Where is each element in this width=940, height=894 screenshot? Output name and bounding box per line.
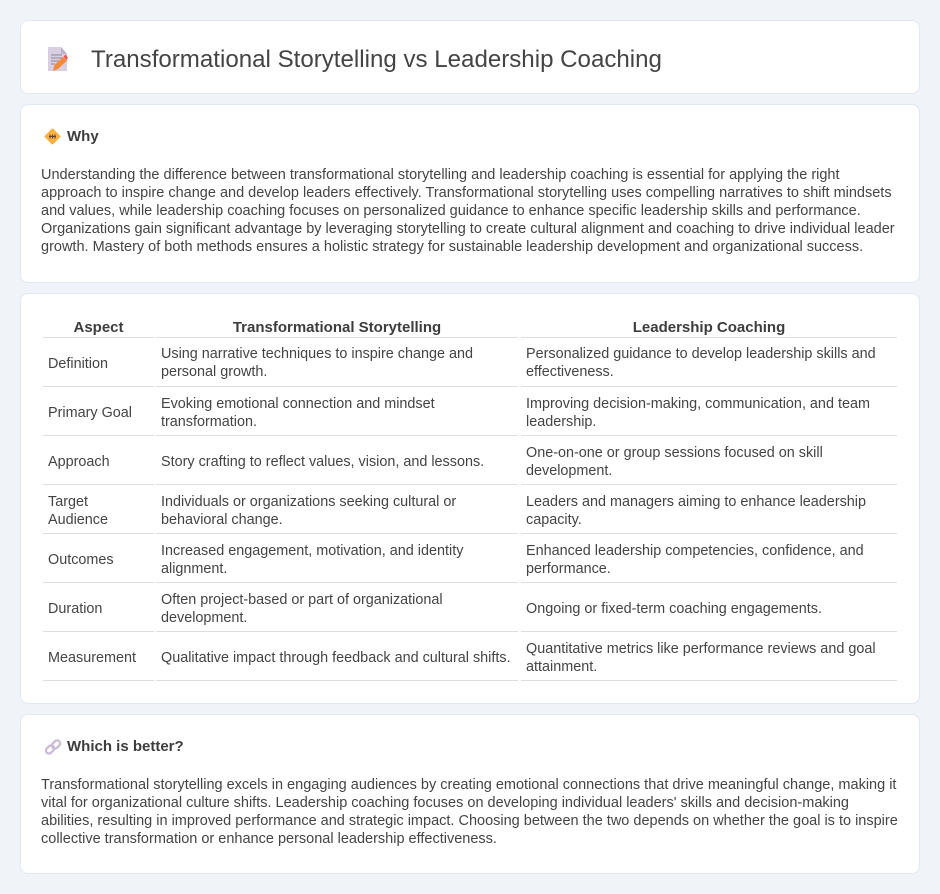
table header <box>73 319 785 336</box>
row: target audience: Target <box>48 494 88 510</box>
row: definition: Personalized guidance to develop leadership skills and <box>526 346 876 362</box>
row: target audience: Audience <box>48 512 108 528</box>
text: which is better paragraph: collective transformation or enhance personal leadership effectiveness. <box>41 831 497 847</box>
row: outcomes: alignment. <box>161 561 227 577</box>
row: approach: One-on-one or group sessions focused on skill <box>526 445 823 461</box>
row: primary goal: Evoking emotional connection and mindset <box>161 396 435 412</box>
row: duration: development. <box>161 610 247 626</box>
text: which is better paragraph: vital for organizational culture shifts. Leadership coaching focuses on developing individual leaders' skills and decision-making <box>41 795 849 811</box>
row: outcomes: Outcomes <box>48 552 114 568</box>
row: target audience: capacity. <box>526 512 582 528</box>
row: definition <box>43 337 897 380</box>
row: outcomes: Enhanced leadership competencies, confidence, and <box>526 543 864 559</box>
text: why paragraph: and values, while leadership coaching focuses on personalized guidance to enhance specific leadership skills and performance. <box>41 203 861 219</box>
text: which is better paragraph: abilities, resulting in improved performance and strategic impact. Choosing between the two depends on whether the goal is to inspire <box>41 813 898 829</box>
panel: which is better <box>20 714 920 874</box>
panel: title <box>20 20 920 94</box>
heading: which is better: Which is better? <box>67 738 184 755</box>
row: measurement: Measurement <box>48 650 136 666</box>
text: why paragraph <box>41 167 895 255</box>
row: primary goal <box>43 386 897 430</box>
row: primary goal: Improving decision-making, communication, and team <box>526 396 870 412</box>
text: which is better paragraph <box>41 777 898 847</box>
icon: document with pencil <box>48 47 68 71</box>
row: target audience: Leaders and managers aiming to enhance leadership <box>526 494 866 510</box>
row: target audience: behavioral change. <box>161 512 283 528</box>
row: duration: Often project-based or part of organizational <box>161 592 443 608</box>
row: definition: effectiveness. <box>526 364 614 380</box>
text: why paragraph: Understanding the difference between transformational storytelling and leadership coaching is essential for applying the right <box>41 167 840 183</box>
row: duration <box>43 582 897 626</box>
panel: comparison table <box>20 293 920 704</box>
icon: link <box>44 739 62 755</box>
text: why paragraph: Organizations gain significant advantage by leveraging storytelling to create cultural alignment and coaching to drive individual leader <box>41 221 895 237</box>
row: outcomes: performance. <box>526 561 611 577</box>
row: approach: Story crafting to reflect values, vision, and lessons. <box>161 454 484 470</box>
text: why paragraph: growth. Mastery of both methods ensures a holistic strategy for sustainable leadership development and organizational success. <box>41 239 863 255</box>
row: definition: Definition <box>48 356 108 372</box>
panel: why <box>20 104 920 283</box>
row: approach <box>43 435 897 479</box>
row: approach: Approach <box>48 454 110 470</box>
row: primary goal: transformation. <box>161 414 257 430</box>
row: measurement: Qualitative impact through feedback and cultural shifts. <box>161 650 511 666</box>
row: target audience <box>43 484 897 528</box>
row: outcomes <box>43 533 897 577</box>
row: target audience: Individuals or organizations seeking cultural or <box>161 494 456 510</box>
row: measurement <box>43 631 897 681</box>
table header: Transformational Storytelling <box>233 319 441 336</box>
row: measurement: Quantitative metrics like performance reviews and goal <box>526 641 876 657</box>
row: definition: Using narrative techniques to inspire change and <box>161 346 473 362</box>
heading: why: Why <box>67 128 99 145</box>
heading: title: Transformational Storytelling vs Leadership Coaching <box>91 46 662 73</box>
row: approach: development. <box>526 463 612 479</box>
row: duration: Duration <box>48 601 102 617</box>
text: which is better paragraph: Transformational storytelling excels in engaging audiences by creating emotional connections that drive meaningful change, making it <box>41 777 896 793</box>
row: measurement: attainment. <box>526 659 597 675</box>
row: primary goal: leadership. <box>526 414 596 430</box>
table header: Aspect <box>73 319 124 336</box>
row: duration: Ongoing or fixed-term coaching engagements. <box>526 601 822 617</box>
icon: diamond sign <box>44 128 60 144</box>
text: why paragraph: approach to inspire change and develop leaders effectively. Transformational storytelling uses compelling narratives to shift mindsets <box>41 185 892 201</box>
row: primary goal: Primary Goal <box>48 405 132 421</box>
table header: Leadership Coaching <box>633 319 785 336</box>
row: definition: personal growth. <box>161 364 267 380</box>
row: outcomes: Increased engagement, motivation, and identity <box>161 543 463 559</box>
